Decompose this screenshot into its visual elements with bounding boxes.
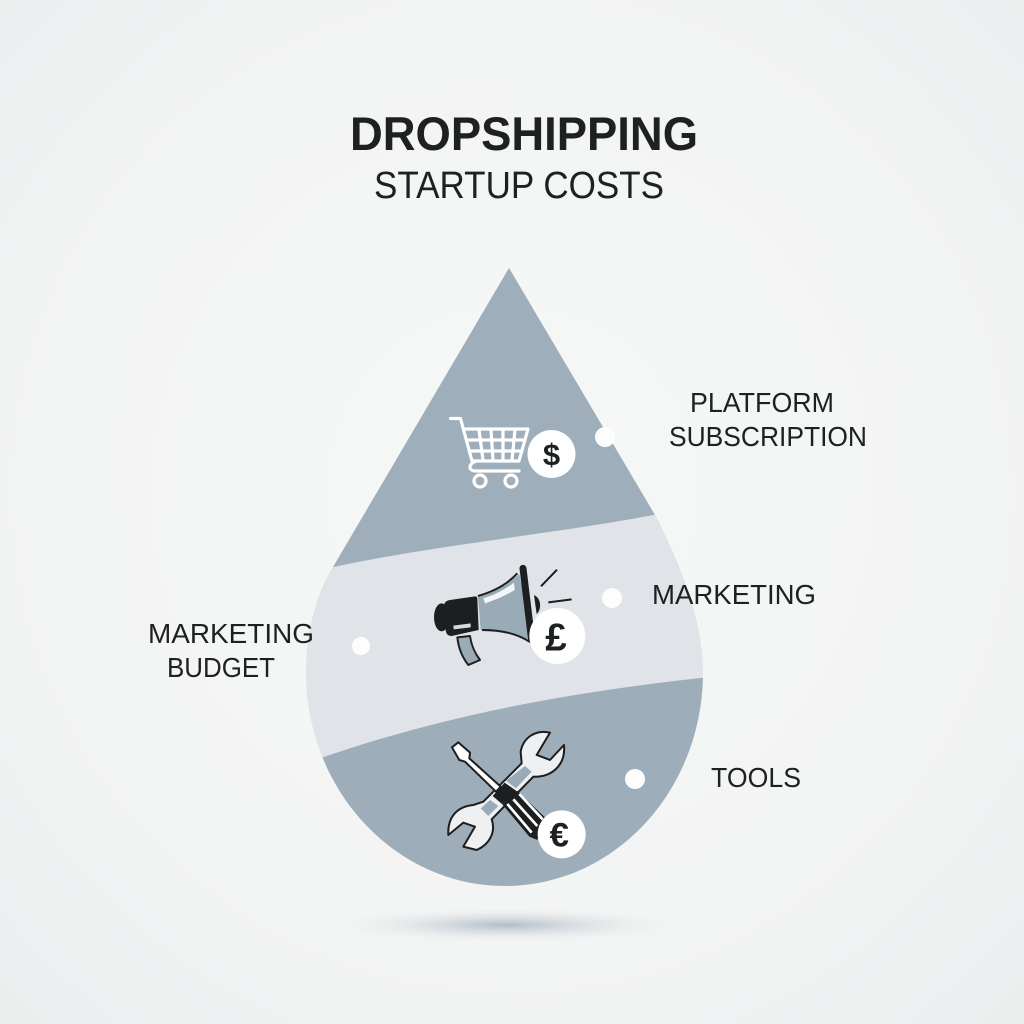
- label: platform subscription: [669, 387, 867, 452]
- label: marketing budget: MARKETING: [148, 618, 314, 649]
- screwdriver handle: [502, 791, 545, 840]
- label: tools: TOOLS: [711, 762, 801, 793]
- icon: shopping cart with dollar: [450, 418, 576, 487]
- megaphone handle: [457, 636, 480, 665]
- marker dot: tools: [625, 769, 645, 789]
- icon: megaphone with pound: £: [545, 616, 567, 659]
- megaphone rim: [523, 568, 532, 640]
- segment: tools: [322, 678, 703, 886]
- marker dot: marketing budget: [352, 637, 370, 655]
- label: platform subscription: PLATFORM: [690, 387, 834, 418]
- label: marketing budget: [148, 618, 314, 683]
- megaphone back cap: [434, 603, 449, 631]
- euro badge: [538, 810, 586, 858]
- megaphone body: [444, 596, 479, 636]
- title: DROPSHIPPING: [350, 107, 698, 160]
- sound lines: [541, 570, 572, 602]
- megaphone cone: [478, 574, 532, 642]
- drop shadow: [336, 908, 676, 942]
- icon: shopping cart with dollar: $: [543, 437, 560, 472]
- icon: megaphone with pound: [434, 568, 585, 665]
- title: STARTUP COSTS: [374, 165, 664, 207]
- icon: crossed wrench and screwdriver with euro: [448, 732, 586, 858]
- screwdriver shaft: [452, 742, 501, 792]
- label: marketing budget: BUDGET: [167, 652, 275, 683]
- title: [350, 107, 698, 207]
- label: platform subscription: SUBSCRIPTION: [669, 421, 867, 452]
- droplet chart: [306, 268, 703, 886]
- marker dot: marketing: [602, 588, 622, 608]
- marker dot: platform subscription: [595, 427, 615, 447]
- segment: marketing: [306, 514, 703, 758]
- icon: crossed wrench and screwdriver with euro: €: [550, 817, 569, 855]
- pound badge: [529, 608, 585, 664]
- label: marketing: MARKETING: [652, 579, 816, 610]
- screwdriver collar: [493, 783, 517, 804]
- segment: platform subscription: [318, 268, 686, 600]
- wrench: [448, 732, 564, 850]
